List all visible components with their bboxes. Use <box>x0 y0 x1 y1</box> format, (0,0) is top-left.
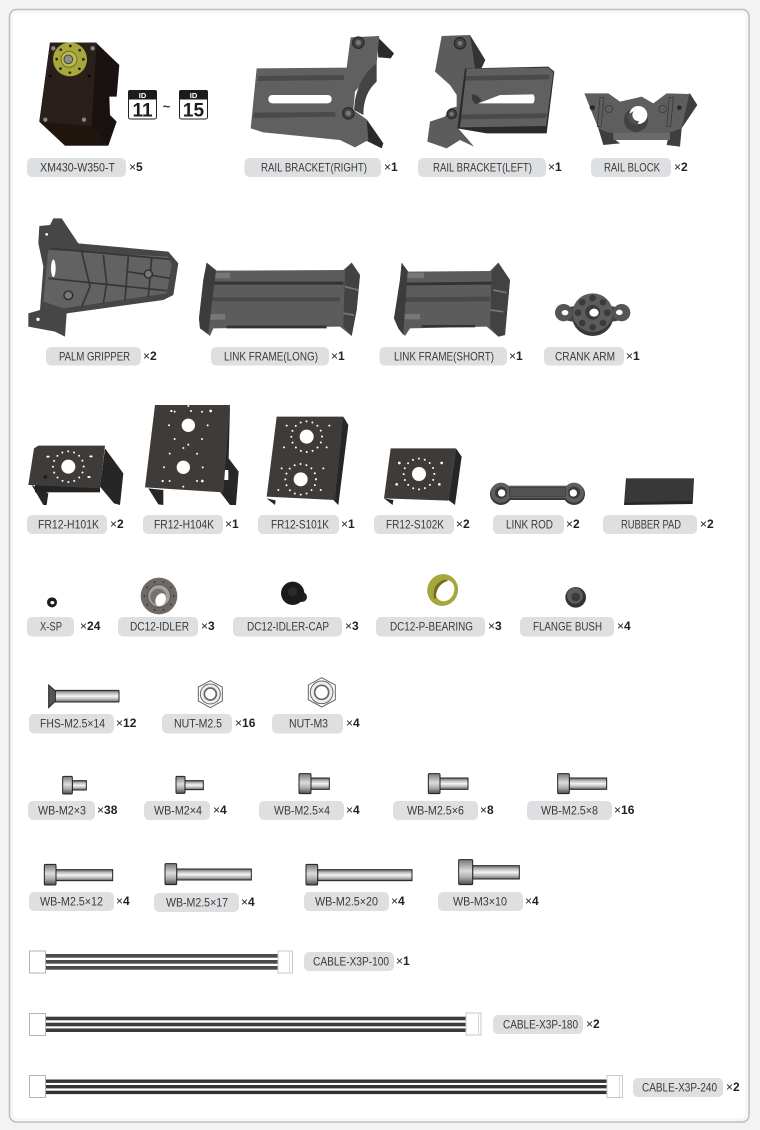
label: rail bracket right: RAIL BRACKET(RIGHT) <box>261 161 367 175</box>
label: cable X3P-100: CABLE-X3P-100 <box>313 955 389 969</box>
icon: NUT-M2.5 <box>198 681 222 708</box>
label: WB-M2.5x8 <box>527 801 635 820</box>
label: crank arm: ×1 <box>626 349 640 363</box>
label: flange bush: FLANGE BUSH <box>533 620 602 634</box>
label: NUT-M2.5 <box>162 714 256 734</box>
icon: bolt WB-M3x10 <box>459 860 519 885</box>
label: WB-M2x4: ×4 <box>213 803 227 817</box>
label: link frame short: LINK FRAME(SHORT) <box>394 350 494 364</box>
label: rail block: ×2 <box>674 160 688 174</box>
icon: FR12-S102K <box>384 448 462 505</box>
label: WB-M2.5x12 <box>29 892 130 911</box>
label: palm gripper: PALM GRIPPER <box>59 350 130 364</box>
label: crank arm <box>544 347 640 366</box>
icon: FR12-S101K <box>267 417 348 505</box>
label: FR12-H104K: ×1 <box>225 517 239 531</box>
label: X-SP: ×24 <box>80 619 101 633</box>
label: X-SP <box>27 617 101 636</box>
icon: FR12-H104K <box>145 405 239 505</box>
label: FR12-H101K <box>27 515 124 534</box>
label: XM430-W350-T: XM430-W350-T <box>40 161 116 175</box>
label: cable X3P-180 <box>493 1015 600 1034</box>
label: link frame long: LINK FRAME(LONG) <box>224 350 318 364</box>
label: WB-M2.5x20: WB-M2.5×20 <box>315 895 378 909</box>
label: FR12-S102K: FR12-S102K <box>386 518 444 532</box>
label: XM430-W350-T: ×5 <box>129 160 143 174</box>
label: link rod <box>493 515 580 534</box>
label: WB-M3x10 <box>438 892 539 911</box>
label: FR12-H101K: ×2 <box>110 517 124 531</box>
icon: DC12-P-BEARING <box>422 569 463 611</box>
label: rail bracket left: RAIL BRACKET(LEFT) <box>433 161 532 175</box>
icon: rubber pad <box>624 478 694 505</box>
label: flange bush: ×4 <box>617 619 631 633</box>
icon: rail bracket right <box>251 36 394 148</box>
label: link frame short: ×1 <box>509 349 523 363</box>
label: WB-M2.5x4 <box>259 801 360 820</box>
icon: ID 15 badge: ID <box>190 91 198 100</box>
label: cable X3P-240 <box>633 1078 740 1097</box>
icon: NUT-M3 <box>308 678 335 707</box>
label: cable X3P-240: ×2 <box>726 1080 740 1094</box>
icon: cable X3P-100 <box>30 951 292 973</box>
label: WB-M2x3: ×38 <box>97 803 118 817</box>
label: WB-M2.5x6 <box>393 801 494 820</box>
label: FR12-H104K <box>143 515 239 534</box>
label: DC12-IDLER-CAP: ×3 <box>345 619 359 633</box>
label: FR12-S102K: ×2 <box>456 517 470 531</box>
label: rubber pad <box>603 515 714 534</box>
label: NUT-M3 <box>272 714 360 734</box>
label: link rod: LINK ROD <box>506 518 553 532</box>
label: NUT-M3: ×4 <box>346 716 360 730</box>
icon: bolt WB-M2.5x12 <box>44 864 113 885</box>
label: cable X3P-100 <box>304 952 410 971</box>
label: DC12-IDLER: ×3 <box>201 619 215 633</box>
icon: palm gripper <box>28 218 178 337</box>
label: DC12-P-BEARING <box>376 617 502 636</box>
label: FR12-H104K: FR12-H104K <box>154 518 214 532</box>
label: DC12-IDLER <box>118 617 215 636</box>
label: cable X3P-180: ×2 <box>586 1017 600 1031</box>
icon: XM430-W350-T servo <box>39 42 119 146</box>
icon: bolt WB-M2x3 <box>63 776 86 794</box>
label: palm gripper: ×2 <box>143 349 157 363</box>
label: WB-M3x10: WB-M3×10 <box>453 895 507 909</box>
icon: DC12-IDLER-CAP <box>281 582 307 605</box>
icon: flange bush <box>565 587 586 608</box>
label: WB-M2.5x12: WB-M2.5×12 <box>40 895 103 909</box>
label: link frame long <box>211 347 345 366</box>
label: link rod: ×2 <box>566 517 580 531</box>
icon: bolt WB-M2x4 <box>176 776 203 793</box>
label: cable X3P-240: CABLE-X3P-240 <box>642 1081 717 1095</box>
icon: ID 11 badge <box>128 90 157 122</box>
label: DC12-P-BEARING: DC12-P-BEARING <box>390 620 473 634</box>
icon: bolt WB-M2.5x4 <box>299 774 329 794</box>
label: WB-M2.5x12: ×4 <box>116 894 130 908</box>
icon: link rod <box>490 483 585 505</box>
label: WB-M2.5x8: ×16 <box>614 803 635 817</box>
label: link frame short <box>380 347 523 366</box>
icon: ID 11 badge: ID <box>139 91 147 100</box>
label: DC12-IDLER-CAP: DC12-IDLER-CAP <box>247 620 329 634</box>
label: link frame long: ×1 <box>331 349 345 363</box>
label: WB-M2.5x8: WB-M2.5×8 <box>541 804 598 818</box>
icon: bolt WB-M2.5x6 <box>428 774 468 794</box>
label: FR12-H101K: FR12-H101K <box>38 518 99 532</box>
label: cable X3P-100: ×1 <box>396 954 410 968</box>
icon: DC12-IDLER <box>141 578 177 614</box>
icon: link frame short <box>394 263 510 337</box>
icon: ID 15 badge <box>179 90 208 122</box>
label: WB-M3x10: ×4 <box>525 894 539 908</box>
label: FHS-M2.5x14: ×12 <box>116 716 137 730</box>
label: rail bracket right <box>244 158 398 177</box>
icon: link frame long <box>199 263 360 336</box>
label: WB-M2.5x17 <box>154 893 255 912</box>
icon: ID 15 badge: 15 <box>183 100 204 122</box>
label: rail bracket right: ×1 <box>384 160 398 174</box>
label: rail bracket left: ×1 <box>548 160 562 174</box>
label: WB-M2.5x20 <box>304 892 405 911</box>
label: WB-M2.5x6: WB-M2.5×6 <box>407 804 464 818</box>
label: NUT-M3: NUT-M3 <box>289 717 328 731</box>
icon: crank arm <box>555 293 630 336</box>
label: rubber pad: RUBBER PAD <box>621 518 681 532</box>
label: DC12-IDLER: DC12-IDLER <box>130 620 189 634</box>
label: FR12-S102K <box>374 515 470 534</box>
label: flange bush <box>520 617 631 636</box>
label: FHS-M2.5x14 <box>29 714 137 734</box>
icon: FHS screw <box>49 685 119 708</box>
label: palm gripper <box>46 347 157 366</box>
icon: bolt WB-M2.5x8 <box>558 774 607 794</box>
label: WB-M2x3 <box>28 801 118 820</box>
label: WB-M2.5x17: WB-M2.5×17 <box>166 896 228 910</box>
label: XM430-W350-T <box>27 158 143 177</box>
icon: rail bracket left <box>427 35 554 148</box>
label: WB-M2.5x4: WB-M2.5×4 <box>274 804 330 818</box>
label: WB-M2.5x17: ×4 <box>241 895 255 909</box>
label: rail block <box>591 158 688 177</box>
label: WB-M2x4: WB-M2×4 <box>154 804 202 818</box>
label: WB-M2.5x6: ×8 <box>480 803 494 817</box>
label: X-SP: X-SP <box>40 620 62 634</box>
label: crank arm: CRANK ARM <box>555 350 615 364</box>
label: rubber pad: ×2 <box>700 517 714 531</box>
icon: bolt WB-M2.5x17 <box>165 864 251 885</box>
label: cable X3P-180: CABLE-X3P-180 <box>503 1018 578 1032</box>
icon: cable X3P-240 <box>30 1076 622 1098</box>
icon: X-SP <box>47 597 57 607</box>
icon: FR12-H101K <box>28 446 123 505</box>
icon: rail block <box>584 93 697 147</box>
label: WB-M2.5x20: ×4 <box>391 894 405 908</box>
icon: ID 11 badge: 11 <box>132 100 153 122</box>
label: rail bracket left <box>418 158 562 177</box>
label: WB-M2.5x4: ×4 <box>346 803 360 817</box>
icon: bolt WB-M2.5x20 <box>306 864 412 885</box>
label: WB-M2x4 <box>144 801 227 820</box>
label: FR12-S101K <box>258 515 355 534</box>
label: NUT-M2.5: ×16 <box>235 716 256 730</box>
tilde between IDs: ~ <box>163 99 171 114</box>
label: DC12-IDLER-CAP <box>233 617 359 636</box>
label: NUT-M2.5: NUT-M2.5 <box>174 717 222 731</box>
icon: cable X3P-180 <box>30 1013 481 1036</box>
label: WB-M2x3: WB-M2×3 <box>38 804 86 818</box>
label: FR12-S101K: ×1 <box>341 517 355 531</box>
label: FR12-S101K: FR12-S101K <box>271 518 329 532</box>
label: FHS-M2.5x14: FHS-M2.5×14 <box>40 717 105 731</box>
label: rail block: RAIL BLOCK <box>604 161 660 175</box>
label: DC12-P-BEARING: ×3 <box>488 619 502 633</box>
